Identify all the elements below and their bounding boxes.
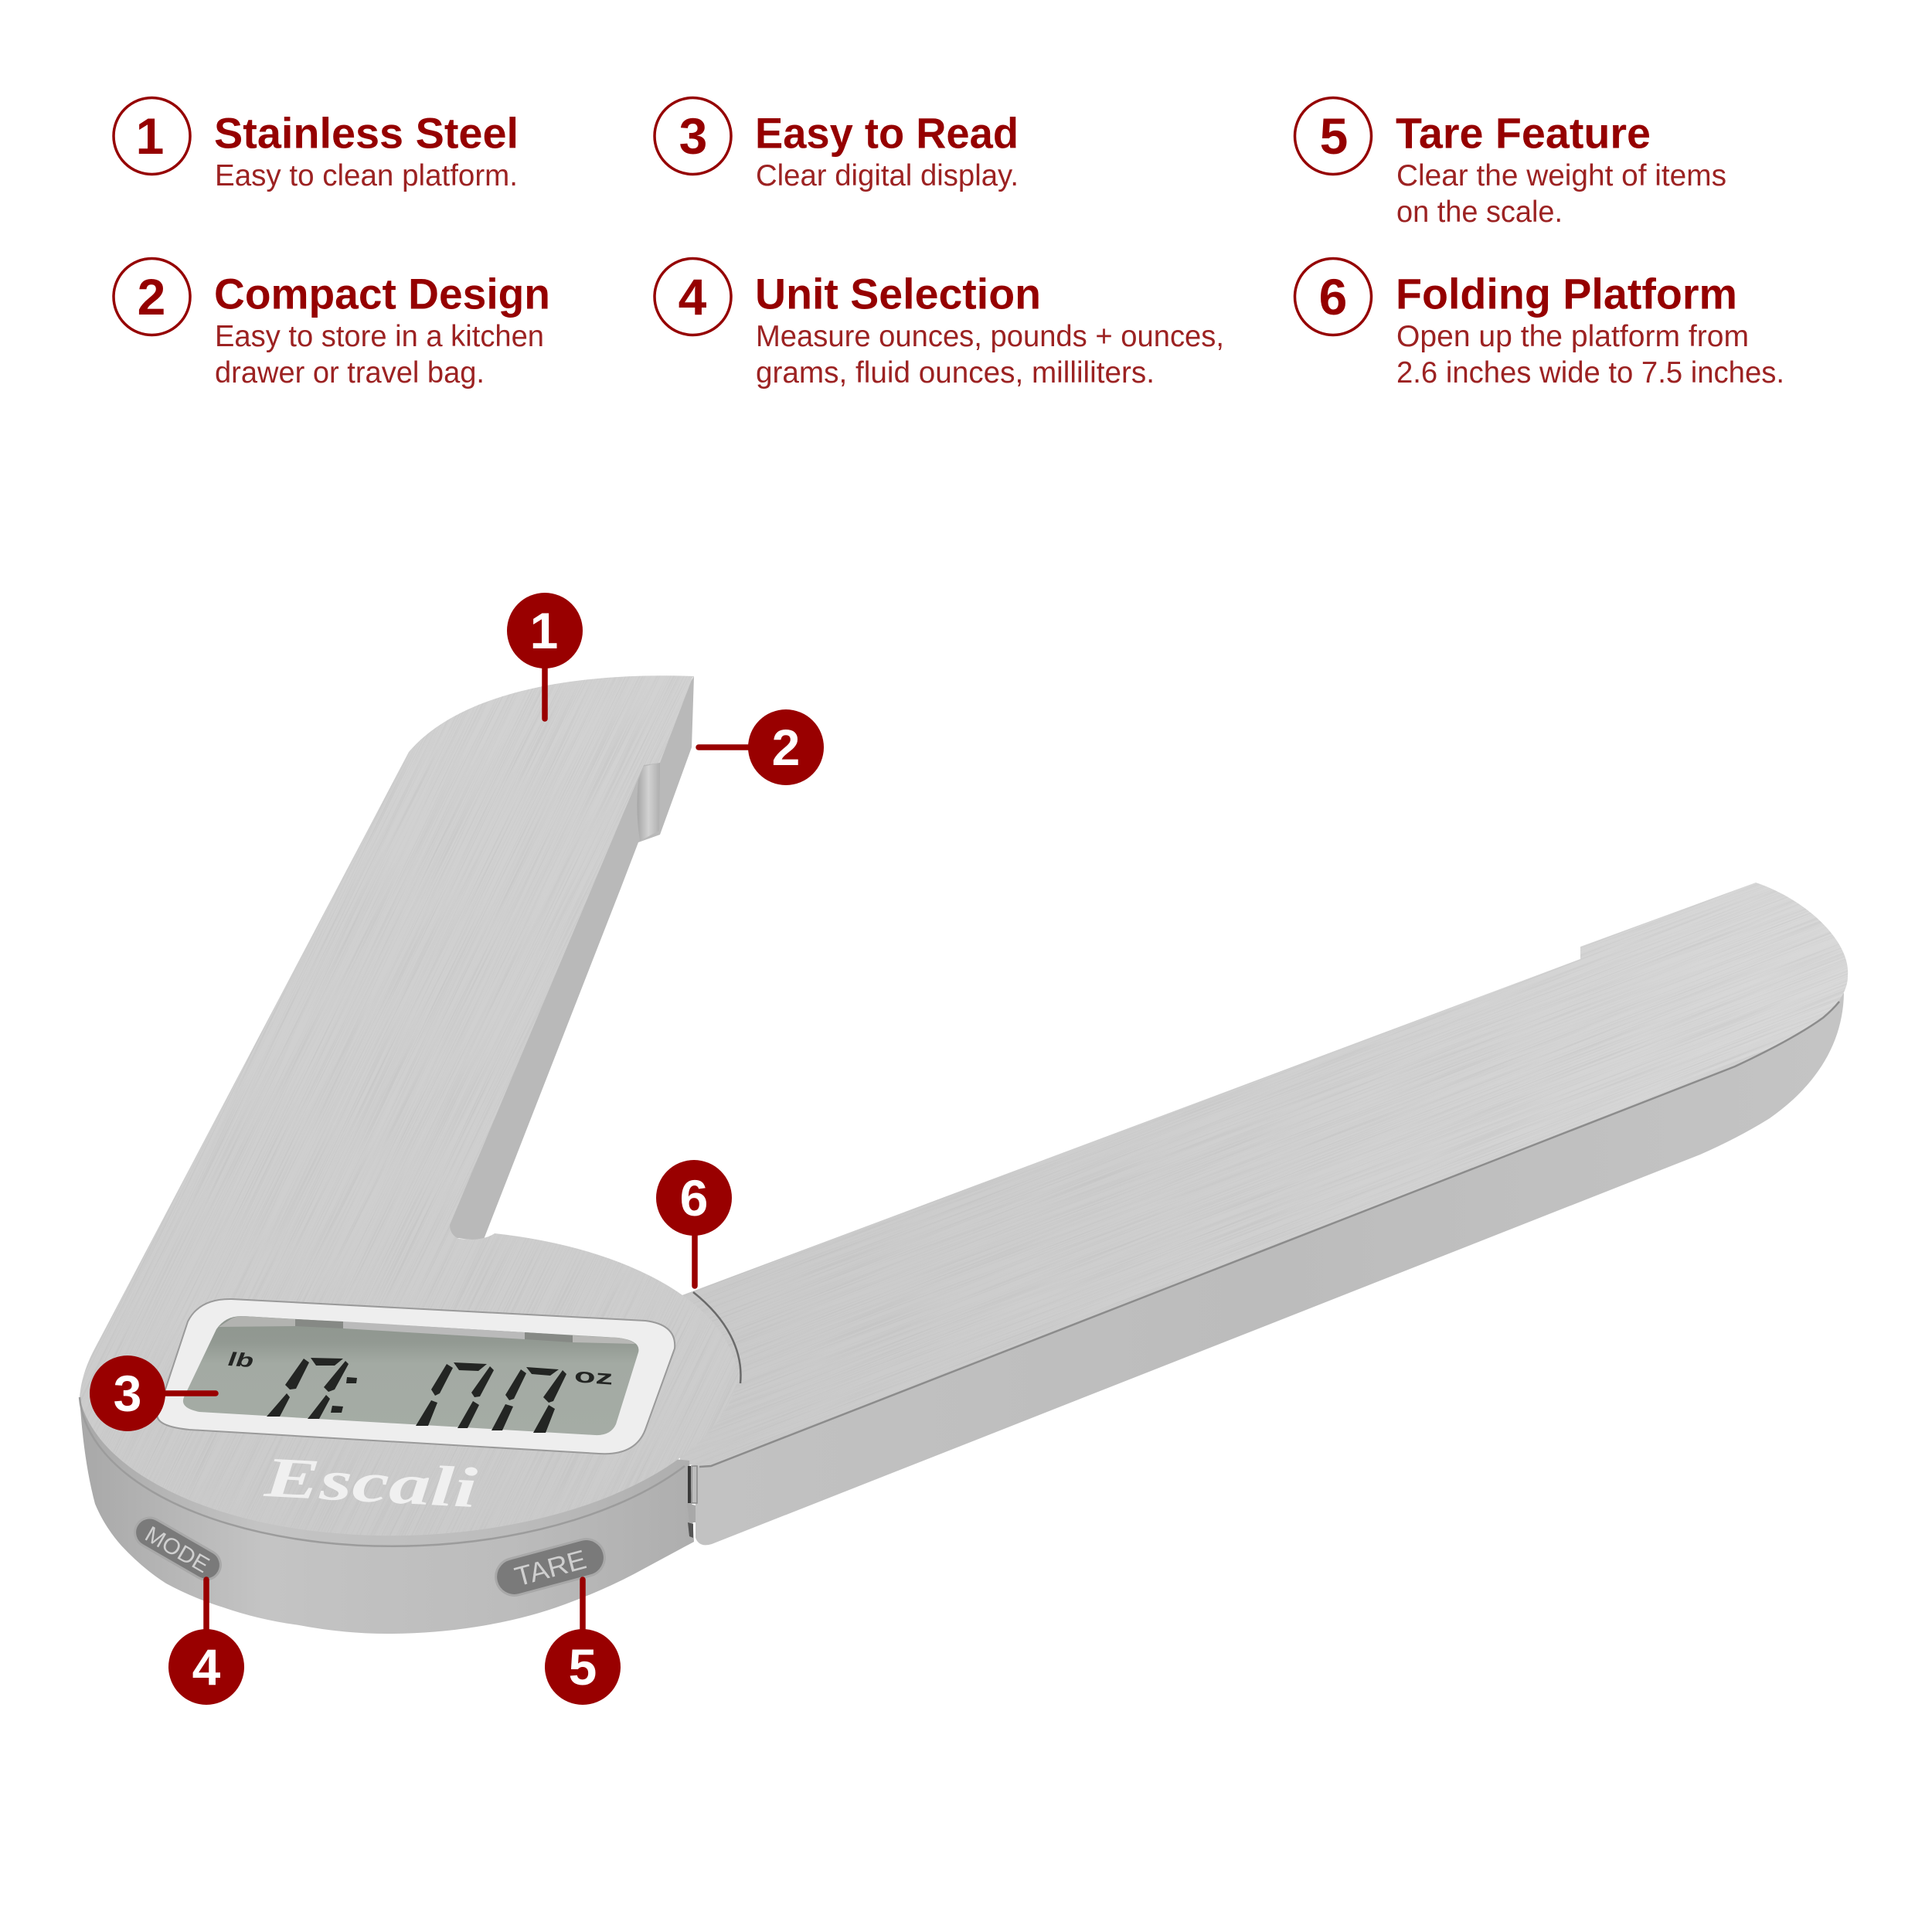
number badge 2: 2: [138, 268, 165, 325]
TARE button: [492, 1535, 609, 1600]
description line 2: folding platform: 2.6 inches wide to 7.5 inches.: [1396, 356, 1784, 389]
heading: Folding Platform: Folding Platform: [1396, 269, 1737, 318]
heading: Stainless Steel: Stainless Steel: [214, 108, 519, 158]
LCD top reflection strip: [219, 1316, 635, 1344]
description: tare feature: Clear the weight of items: [1396, 159, 1726, 192]
brand logo: Escali: Escali: [262, 1446, 479, 1520]
description: folding platform: Open up the platform from: [1396, 320, 1749, 353]
right arm of scale: [680, 883, 1849, 1546]
number badge 3: 3: [679, 107, 707, 165]
callout 6: folding hinge: 6: [680, 1169, 708, 1226]
callout 2: compact tip: [699, 709, 824, 785]
left arm inner side wall: [444, 676, 694, 1241]
description: stainless steel: Easy to clean platform.: [215, 159, 518, 192]
feature 2: compact design: [114, 258, 550, 389]
callout 3: display: [90, 1355, 216, 1431]
number badge 5: [1295, 97, 1371, 175]
LCD colon: [331, 1377, 357, 1413]
heading: Tare Feature: Tare Feature: [1396, 108, 1651, 158]
feature 4: unit selection: [655, 258, 1224, 389]
LCD screen: [183, 1316, 638, 1435]
number badge 6: 6: [1319, 268, 1347, 325]
number badge 4: [655, 258, 731, 335]
description: compact design: Easy to store in a kitchen: [215, 320, 544, 353]
description: easy to read: Clear digital display.: [756, 159, 1019, 192]
display bezel: [157, 1299, 675, 1454]
unit label: lb: lb: [227, 1349, 254, 1372]
description: unit selection: Measure ounces, pounds + ounces,: [756, 320, 1224, 353]
LCD digit three: [492, 1367, 566, 1433]
hinge: [687, 1466, 697, 1538]
callout 5: tare button: [545, 1580, 621, 1705]
feature list: [114, 97, 1784, 389]
number badge 4: 4: [679, 268, 707, 325]
number badge 3: [655, 97, 731, 175]
folding kitchen scale illustration: [79, 675, 1849, 1634]
feature 5: tare feature: [1295, 97, 1726, 229]
LCD digit two: [416, 1362, 494, 1428]
number badge 6: [1295, 258, 1371, 335]
heading: Easy to Read: Easy to Read: [755, 108, 1019, 158]
TARE button: TARE: [512, 1544, 590, 1592]
description line 2: compact design: drawer or travel bag.: [215, 356, 485, 389]
MODE button: MODE: [141, 1522, 213, 1578]
callout 6: folding hinge: [656, 1160, 732, 1286]
callout 4: mode button: [168, 1580, 244, 1705]
callout 1: stainless steel platform: [507, 593, 583, 719]
feature 6: folding platform: [1295, 258, 1784, 389]
left arm and base disc brushed top face: [79, 675, 742, 1547]
notch in left arm: [637, 763, 660, 841]
MODE button: [130, 1512, 226, 1585]
callout 4: mode button: 4: [192, 1638, 221, 1696]
callout 2: compact tip: 2: [772, 719, 800, 776]
unit label: oz: oz: [573, 1363, 614, 1389]
callout 3: display: 3: [114, 1365, 141, 1422]
number badge 5: 5: [1320, 107, 1348, 165]
number badge 2: [114, 258, 190, 335]
number badge 1: 1: [136, 107, 164, 165]
description line 2: unit selection: grams, fluid ounces, milliliters.: [756, 356, 1155, 389]
feature 1: stainless steel: [114, 97, 519, 192]
LCD digit one: [267, 1358, 349, 1419]
description line 2: tare feature: on the scale.: [1396, 196, 1563, 229]
callout 1: stainless steel platform: 1: [530, 602, 558, 659]
feature 3: easy to read: [655, 97, 1019, 192]
right arm side wall: [696, 993, 1844, 1545]
heading: Compact Design: Compact Design: [214, 269, 550, 318]
number badge 1: [114, 97, 190, 175]
heading: Unit Selection: Unit Selection: [755, 269, 1041, 318]
right arm brushed top face: [680, 883, 1849, 1468]
callout 5: tare button: 5: [569, 1638, 597, 1696]
base disc side wall: [80, 1397, 694, 1634]
